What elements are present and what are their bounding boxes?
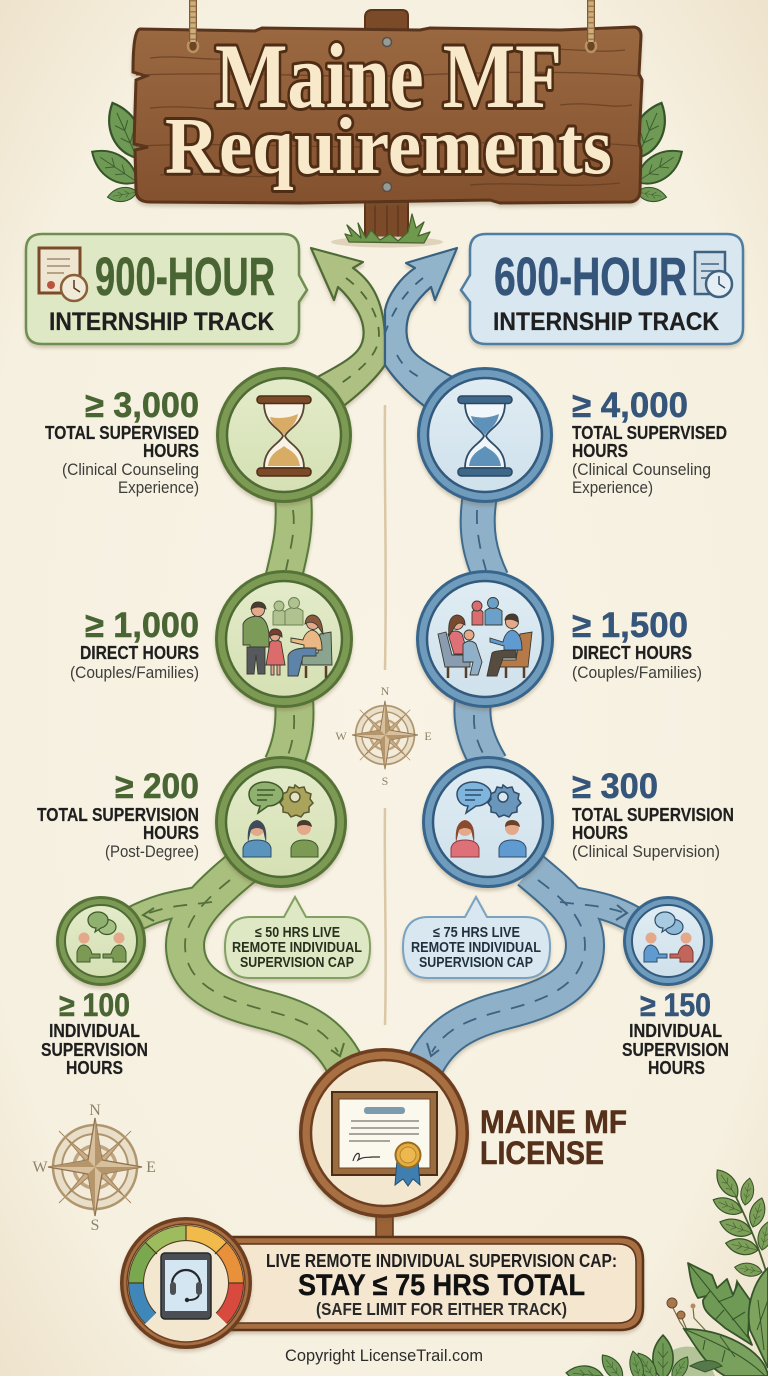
stat: blue 300: TOTAL SUPERVISION	[572, 805, 734, 825]
stat: blue 300: (Clinical Supervision)	[572, 843, 720, 861]
panel: 900-hour track: 900-HOUR	[95, 247, 275, 307]
icon: family	[438, 598, 532, 678]
icon: certificate	[332, 1092, 437, 1186]
stat: blue 4,000: TOTAL SUPERVISED	[572, 423, 727, 443]
road: green main path	[132, 495, 345, 1065]
icon: two people talking	[77, 912, 126, 962]
stat: blue 300: ≥ 300	[572, 767, 658, 806]
node: blue direct hours	[416, 570, 554, 708]
icon: two people talking	[644, 912, 693, 962]
stat: blue 1,500: DIRECT HOURS	[572, 643, 692, 663]
panel: 600-hour track	[461, 234, 743, 344]
node: green total supervised hours	[216, 367, 352, 503]
stat: blue 1,500	[572, 606, 702, 682]
license label: LICENSE	[480, 1135, 604, 1171]
road: blue main path	[425, 495, 635, 1065]
license label	[480, 1104, 627, 1171]
panel: 600-hour track: 600-HOUR	[494, 247, 687, 307]
center divider line	[384, 405, 387, 1025]
icon: hourglass	[458, 396, 512, 476]
icon: small compass	[335, 684, 432, 788]
icon: large compass	[32, 1102, 156, 1234]
callout: green 50 hrs cap: REMOTE INDIVIDUAL	[232, 940, 362, 956]
plant: bottom right foliage	[565, 1165, 768, 1376]
title text: Maine MF	[215, 25, 562, 127]
stat: green 200: ≥ 200	[115, 767, 199, 806]
stat: green 200: (Post-Degree)	[105, 843, 199, 861]
icon: small compass: S	[382, 774, 388, 788]
icon: hanging ropes	[193, 0, 591, 42]
stat: blue 4,000: ≥ 4,000	[572, 386, 688, 425]
stat: green 100: ≥ 100	[59, 987, 130, 1023]
stat: blue 1,500: (Couples/Families)	[572, 664, 702, 682]
gauge segments	[128, 1225, 244, 1318]
stat: green 1,000: (Couples/Families)	[70, 664, 199, 682]
icon: tablet with headset	[161, 1253, 211, 1319]
stat: green 1,000: DIRECT HOURS	[80, 643, 199, 663]
connector post	[376, 1212, 393, 1244]
panel: live remote cap: (SAFE LIMIT FOR EITHER TRACK)	[316, 1299, 567, 1319]
stat: blue 150: ≥ 150	[640, 987, 711, 1023]
stat: blue 1,500: ≥ 1,500	[572, 606, 688, 645]
icon: chat, gear and people	[243, 782, 318, 857]
stat: blue 300: HOURS	[572, 823, 628, 843]
icon: small compass: E	[424, 729, 432, 743]
stat: green 200	[37, 767, 199, 861]
stat: blue 150	[622, 987, 729, 1078]
icon: small compass: N	[381, 684, 390, 698]
arrow: blue road to 600-hour	[382, 248, 458, 410]
node: green individual supervision	[56, 896, 146, 986]
copyright: Copyright LicenseTrail.com	[285, 1347, 483, 1365]
callout: blue 75 hrs cap: REMOTE INDIVIDUAL	[411, 940, 541, 956]
icon: large compass: N	[89, 1102, 101, 1119]
stat: green 3,000: ≥ 3,000	[85, 386, 199, 425]
icon: large compass: W	[32, 1159, 48, 1176]
title text	[165, 25, 612, 191]
node: blue total supervision	[422, 756, 554, 888]
stat: green 100	[41, 987, 148, 1078]
node: blue individual supervision	[623, 896, 713, 986]
callout: green 50 hrs cap: SUPERVISION CAP	[240, 955, 354, 971]
stat: green 100: SUPERVISION	[41, 1040, 148, 1060]
arrow: green road to 900-hour	[311, 248, 385, 410]
stat: green 3,000: Experience)	[118, 479, 199, 497]
icon: document and clock	[695, 252, 732, 297]
license label: MAINE MF	[480, 1104, 627, 1140]
stat: green 200: TOTAL SUPERVISION	[37, 805, 199, 825]
icon: large compass: S	[91, 1217, 99, 1234]
stat: green 3,000	[45, 386, 199, 497]
wooden sign post	[331, 10, 443, 248]
stat: green 100: INDIVIDUAL	[49, 1021, 140, 1041]
panel: 900-hour track	[26, 234, 307, 344]
stat: blue 4,000	[572, 386, 727, 497]
icon: small compass: W	[335, 729, 347, 743]
callout: green 50 hrs cap	[225, 897, 370, 978]
stat: green 3,000: HOURS	[143, 441, 199, 461]
stat: blue 300	[572, 767, 734, 861]
callout: blue 75 hrs cap: SUPERVISION CAP	[419, 955, 533, 971]
panel: 600-hour track: INTERNSHIP TRACK	[493, 308, 719, 336]
callout: green 50 hrs cap: ≤ 50 HRS LIVE	[255, 925, 340, 941]
panel: live remote cap: LIVE REMOTE INDIVIDUAL SUPERVISION CAP:	[266, 1250, 617, 1271]
node: blue total supervised hours	[417, 367, 553, 503]
stat: blue 150: SUPERVISION	[622, 1040, 729, 1060]
stat: green 1,000	[70, 606, 199, 682]
callout: blue 75 hrs cap	[403, 897, 550, 978]
stat: blue 150: HOURS	[648, 1058, 705, 1078]
icon: hourglass	[257, 396, 311, 476]
stat: blue 4,000: Experience)	[572, 479, 653, 497]
callout: blue 75 hrs cap: ≤ 75 HRS LIVE	[433, 925, 520, 941]
icon: sign leaves	[85, 97, 689, 204]
icon: family	[243, 598, 332, 678]
gauge with tablet	[120, 1217, 252, 1349]
panel: 900-hour track: INTERNSHIP TRACK	[49, 308, 274, 336]
stat: green 200: HOURS	[143, 823, 199, 843]
title sign	[133, 27, 642, 203]
stat: blue 4,000: HOURS	[572, 441, 628, 461]
title text: Requirements	[165, 103, 612, 191]
stat: green 3,000: (Clinical Counseling	[62, 461, 199, 479]
node: Maine MF license	[299, 1048, 469, 1218]
stat: blue 4,000: (Clinical Counseling	[572, 461, 711, 479]
panel: live remote cap	[215, 1237, 643, 1330]
node: green total supervision	[215, 756, 347, 888]
node: green direct hours	[215, 570, 353, 708]
icon: large compass: E	[146, 1159, 156, 1176]
icon: chat, gear and people	[451, 782, 526, 857]
stat: green 1,000: ≥ 1,000	[85, 606, 199, 645]
stat: green 3,000: TOTAL SUPERVISED	[45, 423, 199, 443]
stat: blue 150: INDIVIDUAL	[629, 1021, 722, 1041]
icon: certificate and clock	[39, 248, 87, 301]
panel: live remote cap: STAY ≤ 75 HRS TOTAL	[298, 1269, 585, 1302]
stat: green 100: HOURS	[66, 1058, 123, 1078]
